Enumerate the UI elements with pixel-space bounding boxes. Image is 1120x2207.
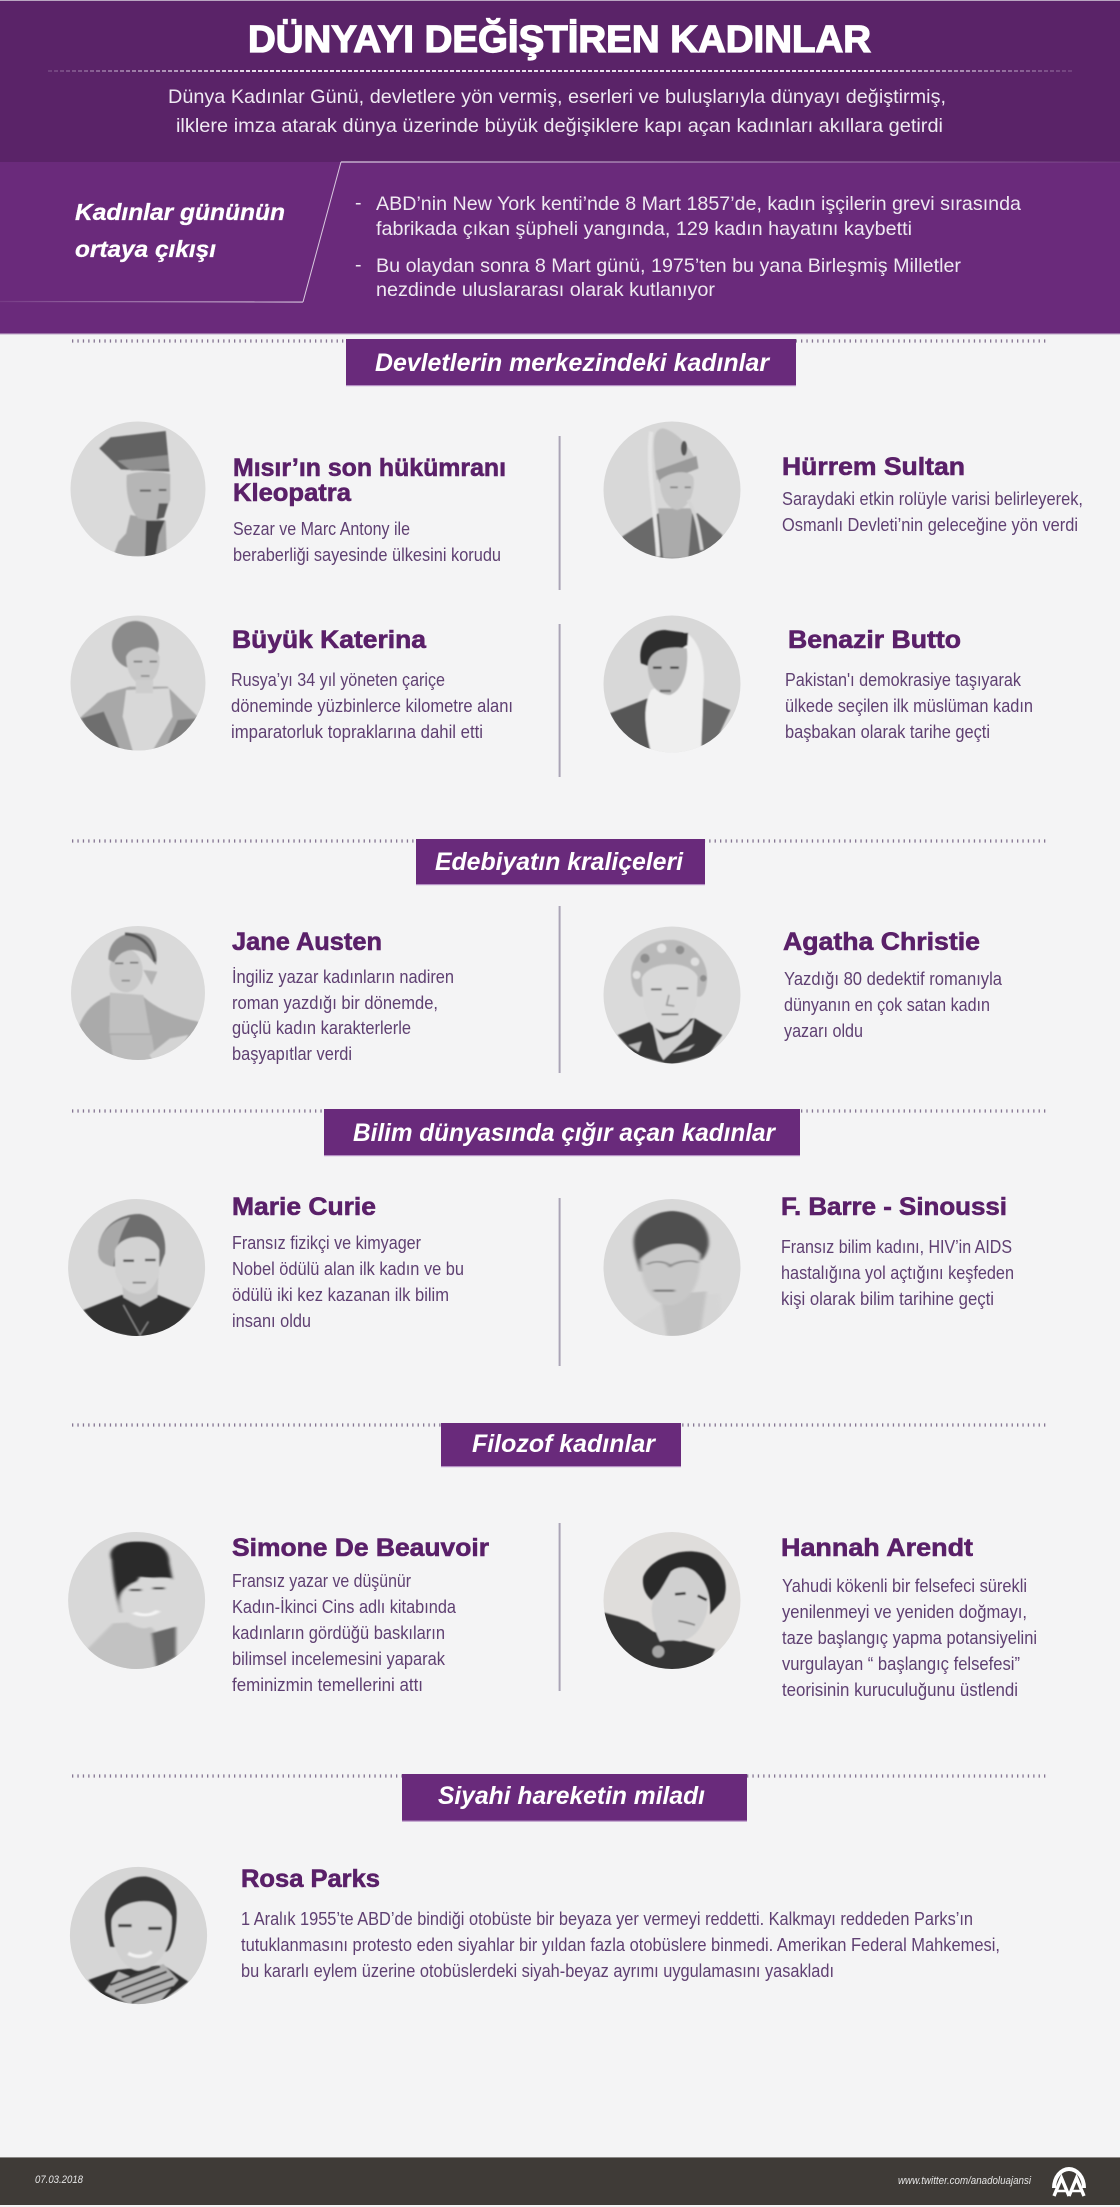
description: 1 Aralık 1955’te ABD’de bindiği otobüste bir beyaza yer vermeyi reddetti. Kalkmayı reddeden Parks’ın	[241, 1909, 973, 1929]
panel: Hannah Arendt	[600, 1530, 1037, 1700]
name: Marie Curie	[232, 1193, 376, 1221]
description: başyapıtlar verdi	[232, 1044, 352, 1064]
description: ülkede seçilen ilk müslüman kadın	[785, 696, 1033, 716]
date: 07.03.2018	[35, 2174, 84, 2186]
subtitle: ilklere imza atarak dünya üzerinde büyük değişiklere kapı açan kadınları akıllara getirdi	[176, 115, 943, 137]
bullet text block: -	[355, 192, 362, 214]
description	[232, 967, 454, 1064]
description: Kadın-İkinci Cins adlı kitabında	[232, 1597, 457, 1617]
section heading: black movement: Siyahi hareketin miladı	[438, 1782, 705, 1810]
section heading: literature: Edebiyatın kraliçeleri	[435, 848, 684, 876]
description: bu kararlı eylem üzerine otobüslerdeki siyah-beyaz ayrımı uygulamasını yasakladı	[241, 1961, 834, 1981]
name: Rosa Parks	[241, 1865, 380, 1893]
source url: www.twitter.com/anadoluajansi	[898, 2175, 1031, 2187]
description	[231, 670, 513, 742]
description: Yazdığı 80 dedektif romanıyla	[784, 969, 1003, 989]
section heading: literature	[416, 839, 705, 885]
icon: portrait Rosa Parks	[68, 1865, 210, 2007]
section heading: black movement	[402, 1774, 747, 1822]
name: Simone De Beauvoir	[232, 1534, 489, 1562]
description: vurgulayan “ başlangıç felsefesi”	[782, 1654, 1020, 1674]
panel: Hürrem Sultan	[600, 420, 1083, 560]
description: Osmanlı Devleti’nin geleceğine yön verdi	[782, 515, 1078, 535]
icon: portrait Katerina	[70, 614, 206, 752]
description: Sezar ve Marc Antony ile	[233, 519, 410, 539]
bullet text block: Bu olaydan sonra 8 Mart günü, 1975’ten bu yana Birleşmiş Milletler	[376, 255, 962, 277]
name: Agatha Christie	[783, 928, 980, 956]
name: Hannah Arendt	[781, 1534, 974, 1562]
description: dünyanın en çok satan kadın	[784, 995, 990, 1015]
description: insanı oldu	[232, 1311, 311, 1331]
description: güçlü kadın karakterlerle	[232, 1018, 411, 1038]
description: teorisinin kuruculuğunu üstlendi	[782, 1680, 1018, 1700]
description: bilimsel incelemesini yaparak	[232, 1649, 446, 1669]
name: Büyük Katerina	[232, 626, 427, 654]
description: Pakistan'ı demokrasiye taşıyarak	[785, 670, 1022, 690]
subtitle	[168, 86, 946, 137]
description: tutuklanmasını protesto eden siyahlar bir yıldan fazla otobüslere binmedi. Amerikan Federal Mahkemesi,	[241, 1935, 1000, 1955]
name: F. Barre - Sinoussi	[781, 1193, 1007, 1221]
description: kişi olarak bilim tarihine geçti	[781, 1289, 994, 1309]
name: Hürrem Sultan	[782, 453, 965, 481]
name	[233, 454, 506, 507]
icon: portrait Hannah Arendt	[600, 1530, 744, 1673]
section heading: philosophers	[441, 1423, 681, 1467]
footer	[0, 2157, 1120, 2205]
description: Fransız yazar ve düşünür	[232, 1571, 411, 1591]
description: yazarı oldu	[784, 1021, 863, 1041]
name: Benazir Butto	[788, 626, 961, 654]
description	[233, 519, 501, 565]
bullet text block	[355, 192, 1021, 301]
section heading: states: Devletlerin merkezindeki kadınlar	[375, 349, 770, 377]
panel heading: ortaya çıkışı	[75, 236, 216, 262]
icon: portrait Marie Curie	[66, 1197, 208, 1339]
bullet text block: nezdinde uluslararası olarak kutlanıyor	[376, 279, 716, 301]
panel heading: Kadınlar gününün	[75, 199, 285, 225]
panel: Kleopatra	[70, 420, 506, 565]
bullet text block: ABD’nin New York kenti’nde 8 Mart 1857’de, kadın işçilerin grevi sırasında	[376, 193, 1021, 215]
description: Saraydaki etkin rolüyle varisi belirleyerek,	[782, 489, 1083, 509]
description	[782, 1576, 1037, 1700]
icon: AA logo	[1052, 2167, 1086, 2196]
description: döneminde yüzbinlerce kilometre alanı	[231, 696, 513, 716]
bullet text block: -	[355, 254, 362, 276]
panel: Jane Austen	[70, 925, 454, 1064]
panel: Büyük Katerina	[70, 614, 513, 752]
panel: F. Barre-Sinoussi	[600, 1193, 1014, 1339]
panel: Marie Curie	[66, 1193, 464, 1339]
panel heading	[75, 199, 285, 262]
description: Yahudi kökenli bir felsefeci sürekli	[782, 1576, 1027, 1596]
description	[784, 969, 1003, 1041]
description	[782, 489, 1083, 535]
title: DÜNYAYI DEĞİŞTİREN KADINLAR	[248, 17, 871, 61]
description: yenilenmeyi ve yeniden doğmayı,	[782, 1602, 1027, 1622]
section heading: science	[324, 1109, 800, 1156]
icon: portrait Jane Austen	[70, 925, 206, 1063]
description: Fransız fizikçi ve kimyager	[232, 1233, 421, 1253]
panel: Agatha Christie	[600, 925, 1003, 1065]
description	[785, 670, 1033, 742]
description: taze başlangıç yapma potansiyelini	[782, 1628, 1037, 1648]
icon: portrait Benazir	[600, 614, 744, 754]
description	[232, 1571, 457, 1695]
subtitle: Dünya Kadınlar Günü, devletlere yön vermiş, eserleri ve buluşlarıyla dünyayı değiştirmiş,	[168, 86, 946, 108]
description	[241, 1909, 1000, 1981]
description: imparatorluk topraklarına dahil etti	[231, 722, 483, 742]
name: Jane Austen	[232, 928, 382, 956]
description: Fransız bilim kadını, HIV’in AIDS	[781, 1237, 1012, 1257]
description: Nobel ödülü alan ilk kadın ve bu	[232, 1259, 464, 1279]
panel: origin of women's day	[0, 162, 1120, 335]
section heading: states	[346, 339, 796, 386]
description: Rusya’yı 34 yıl yöneten çariçe	[231, 670, 445, 690]
description	[232, 1233, 464, 1331]
panel: Simone De Beauvoir	[66, 1530, 489, 1695]
name: Kleopatra	[233, 479, 352, 507]
icon: portrait Agatha Christie	[600, 925, 744, 1065]
icon: portrait Kleopatra	[70, 420, 206, 558]
panel: Rosa Parks	[68, 1865, 1000, 2007]
section heading: philosophers: Filozof kadınlar	[472, 1430, 656, 1458]
description: beraberliği sayesinde ülkesini korudu	[233, 545, 501, 565]
description: ödülü iki kez kazanan ilk bilim	[232, 1285, 449, 1305]
header panel	[0, 0, 1120, 163]
icon: portrait Hürrem	[600, 420, 744, 560]
description: başbakan olarak tarihe geçti	[785, 722, 990, 742]
icon: portrait Barre-Sinoussi	[600, 1197, 744, 1339]
description: İngiliz yazar kadınların nadiren	[232, 967, 454, 987]
description: hastalığına yol açtığını keşfeden	[781, 1263, 1014, 1283]
section heading: science: Bilim dünyasında çığır açan kadınlar	[353, 1119, 776, 1147]
icon: portrait Beauvoir	[66, 1530, 208, 1672]
bullet text block: fabrikada çıkan şüpheli yangında, 129 kadın hayatını kaybetti	[376, 218, 912, 240]
description: kadınların gördüğü baskıların	[232, 1623, 445, 1643]
description: roman yazdığı bir dönemde,	[232, 993, 438, 1013]
name: Mısır’ın son hükümranı	[233, 454, 506, 482]
description: feminizmin temellerini attı	[232, 1675, 423, 1695]
description	[781, 1237, 1014, 1309]
panel: Benazir Butto	[600, 614, 1033, 754]
